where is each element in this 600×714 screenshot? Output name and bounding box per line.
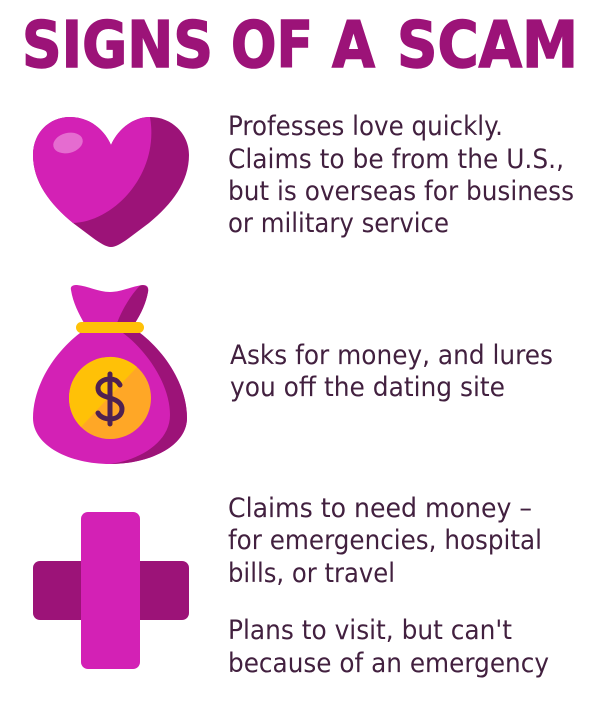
title: SCAM bbox=[397, 9, 578, 83]
icon: medical cross bbox=[33, 512, 189, 669]
text: love and overseas claims: but is overseas for business bbox=[228, 176, 574, 207]
title bbox=[22, 9, 578, 83]
text: love and overseas claims: Professes love quickly. bbox=[228, 111, 503, 142]
text: love and overseas claims: or military service bbox=[228, 208, 449, 239]
title: OF bbox=[231, 9, 313, 83]
title: SIGNS bbox=[22, 9, 213, 83]
text: money and dating site: Asks for money, and lures bbox=[230, 340, 553, 371]
text: money and dating site bbox=[230, 340, 553, 403]
icon: heart bbox=[33, 117, 189, 247]
text: money and dating site: you off the dating site bbox=[230, 372, 505, 403]
icon: money bag bbox=[33, 285, 187, 464]
text: love and overseas claims: Claims to be from the U.S., bbox=[228, 144, 564, 175]
text: plans to visit: Plans to visit, but can't bbox=[228, 615, 512, 646]
text: plans to visit bbox=[228, 615, 549, 679]
text: emergencies and hospital bills: for emergencies, hospital bbox=[228, 525, 542, 556]
text: emergencies and hospital bills: bills, or travel bbox=[228, 558, 395, 589]
text: emergencies and hospital bills bbox=[228, 493, 542, 589]
title: A bbox=[332, 9, 375, 83]
text: love and overseas claims bbox=[228, 111, 574, 239]
text: emergencies and hospital bills: Claims to need money – bbox=[228, 493, 532, 524]
text: plans to visit: because of an emergency bbox=[228, 648, 549, 679]
